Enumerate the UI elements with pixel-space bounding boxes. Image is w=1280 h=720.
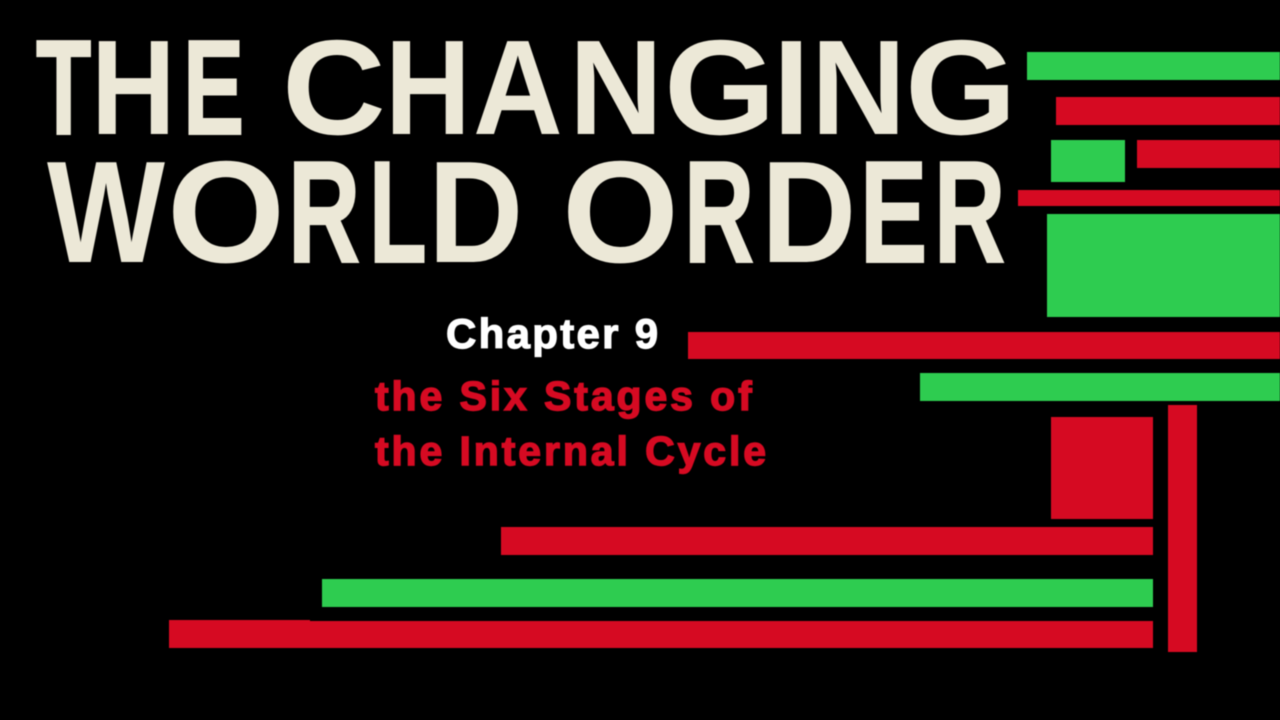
title: E	[860, 131, 928, 293]
title: O	[562, 131, 679, 293]
title: C	[282, 12, 386, 163]
title: T	[36, 12, 91, 163]
title: H	[91, 12, 176, 163]
title: D	[428, 131, 523, 293]
title: G	[664, 12, 776, 163]
title: R	[934, 131, 1006, 293]
subtitle: the Internal Cycle	[375, 428, 769, 474]
title: H	[385, 12, 471, 163]
title: L	[369, 131, 426, 293]
chapter label: Chapter 9	[446, 310, 660, 357]
title: I	[773, 12, 810, 163]
title: R	[684, 131, 754, 293]
title: E	[183, 12, 244, 163]
subtitle	[374, 373, 769, 475]
title: O	[166, 131, 285, 293]
title: R	[288, 131, 361, 293]
title: W	[46, 131, 164, 293]
title	[36, 12, 1017, 293]
title: N	[811, 12, 906, 163]
title: D	[761, 131, 856, 293]
title: N	[569, 12, 663, 163]
title: G	[905, 12, 1017, 163]
title: A	[473, 12, 563, 163]
subtitle: the Six Stages of	[375, 373, 755, 419]
